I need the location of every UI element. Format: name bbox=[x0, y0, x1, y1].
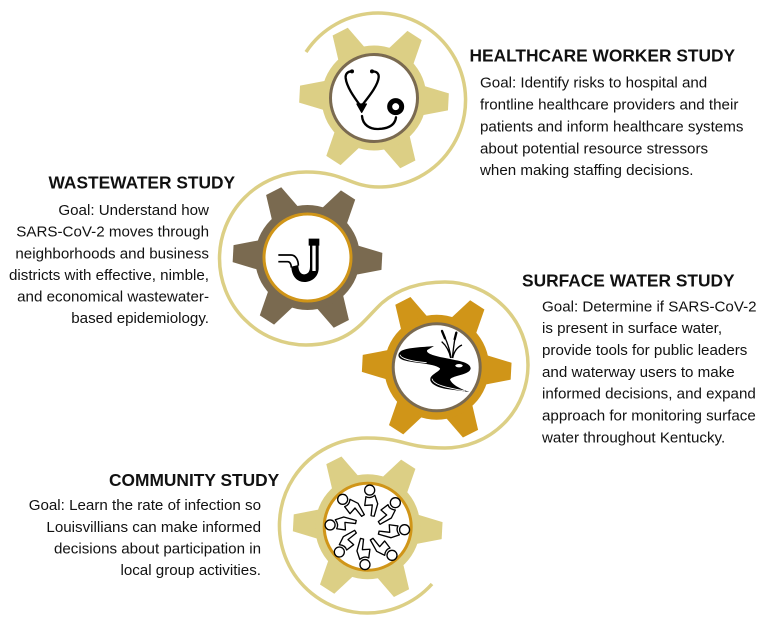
body: surface water goal: and waterway users to make bbox=[542, 364, 735, 381]
body: community goal: decisions about participation in bbox=[54, 540, 261, 558]
gear: community bbox=[290, 450, 446, 603]
body: healthcare goal: about potential resource stressors bbox=[480, 140, 709, 158]
body: healthcare goal: frontline healthcare providers and their bbox=[480, 96, 738, 114]
body: wastewater goal bbox=[9, 202, 209, 327]
body: healthcare goal bbox=[479, 74, 744, 179]
text block: wastewater study bbox=[9, 172, 236, 327]
text block: surface water study bbox=[522, 270, 757, 447]
body: community goal: Goal: Learn the rate of infection so bbox=[29, 497, 261, 514]
text block: community study bbox=[29, 470, 280, 579]
body: surface water goal: Goal: Determine if SARS-CoV-2 bbox=[542, 299, 757, 316]
body: wastewater goal: Goal: Understand how bbox=[58, 202, 209, 219]
gear: surface water bbox=[359, 291, 515, 444]
icon: river with reeds bbox=[398, 331, 471, 392]
heading: healthcare worker study: HEALTHCARE WORKER STUDY bbox=[470, 46, 736, 66]
heading: wastewater study: WASTEWATER STUDY bbox=[48, 172, 236, 192]
body: wastewater goal: neighborhoods and business bbox=[15, 246, 209, 263]
body: wastewater goal: and economical wastewater- bbox=[17, 289, 209, 306]
body: community goal bbox=[29, 497, 261, 579]
body: surface water goal: informed decisions, and expand bbox=[542, 386, 756, 403]
body: community goal: Louisvillians can make informed bbox=[46, 519, 261, 536]
gear: healthcare worker bbox=[296, 22, 452, 174]
body: surface water goal: is present in surface water, bbox=[542, 320, 722, 337]
icon: stethoscope bbox=[346, 70, 402, 129]
body: surface water goal: approach for monitoring surface bbox=[542, 408, 756, 425]
heading: community study: COMMUNITY STUDY bbox=[109, 470, 280, 490]
text block: healthcare worker study bbox=[470, 46, 744, 179]
body: wastewater goal: districts with effective, nimble, bbox=[9, 267, 209, 284]
body: community goal: local group activities. bbox=[120, 562, 261, 579]
body: surface water goal: water throughout Kentucky. bbox=[541, 430, 725, 447]
body: healthcare goal: when making staffing decisions. bbox=[479, 162, 694, 179]
heading: surface water study: SURFACE WATER STUDY bbox=[522, 270, 735, 290]
body: surface water goal bbox=[541, 299, 757, 447]
body: wastewater goal: based epidemiology. bbox=[71, 310, 209, 327]
icon: people in a circle bbox=[323, 483, 412, 572]
connecting spiral line bbox=[219, 13, 528, 613]
gear: wastewater bbox=[229, 181, 386, 334]
body: surface water goal: provide tools for public leaders bbox=[542, 342, 748, 359]
body: healthcare goal: patients and inform healthcare systems bbox=[480, 118, 744, 136]
icon: drain pipe bbox=[278, 239, 319, 282]
body: healthcare goal: Goal: Identify risks to hospital and bbox=[480, 74, 707, 92]
body: wastewater goal: SARS-CoV-2 moves through bbox=[16, 224, 209, 241]
